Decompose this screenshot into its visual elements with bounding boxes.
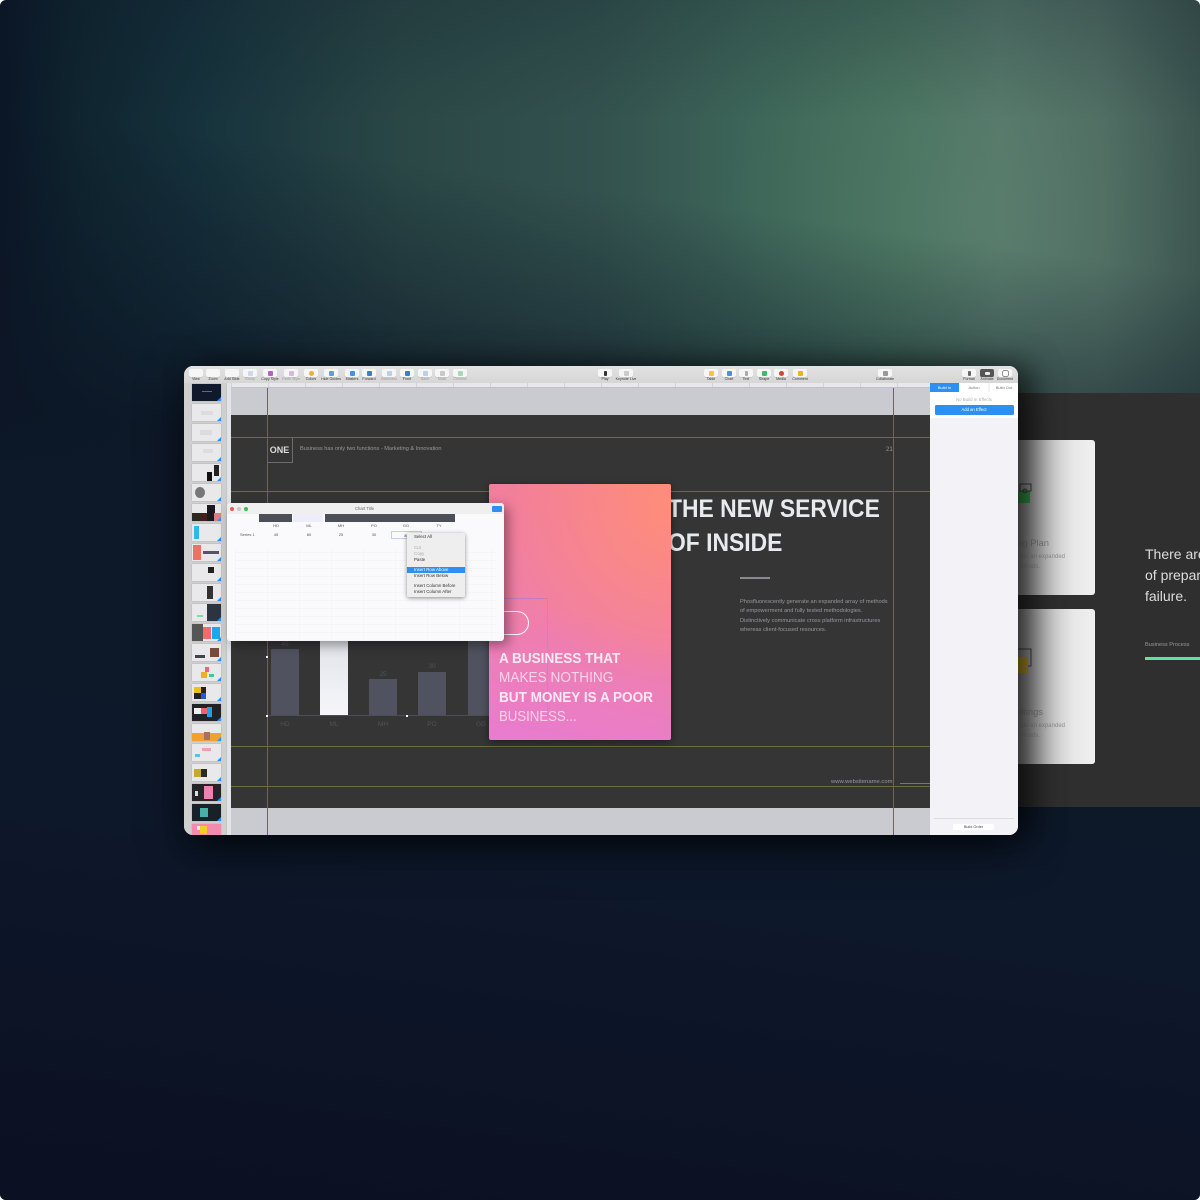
tab: build out: Build Out: [996, 385, 1012, 390]
chart data window: 80: [307, 532, 311, 537]
tool: mask: [435, 369, 449, 381]
icon: folder: [1018, 648, 1032, 673]
selected cell: [391, 531, 422, 539]
menu highlight: [407, 567, 465, 573]
title line 2: OF INSIDE: [668, 529, 782, 557]
tool: view: [189, 369, 203, 381]
tool: paste style: [282, 369, 300, 381]
canvas: grey workspace: [231, 388, 931, 835]
tool: front: Front: [403, 377, 411, 381]
tool: masters: Masters: [346, 377, 358, 381]
card text: methods.: [1015, 564, 1040, 570]
thumbnail 15: [192, 664, 221, 681]
tool: back: Back: [421, 377, 429, 381]
tool: mask: Mask: [438, 377, 446, 381]
tool: connect: Connect: [453, 377, 467, 381]
card line 4: BUSINESS...: [499, 709, 577, 725]
no effects header: [930, 392, 1018, 418]
quote text: failure.: [1145, 588, 1187, 604]
tool: keynote live: Keynote Live: [616, 377, 636, 381]
body paragraph: of empowerment and fully tested methodologies.: [740, 608, 862, 614]
tool: comment: Comment: [792, 377, 808, 381]
menu: select all: Select All: [414, 534, 432, 539]
card text: methods.: [1015, 733, 1040, 739]
card text: Generate an expanded: [1004, 554, 1065, 560]
tool: media: [774, 369, 788, 381]
right inspector panel: [930, 383, 1018, 835]
horizontal ruler: [231, 383, 931, 388]
chart data window: GG: [403, 523, 409, 528]
tool: group: [243, 369, 257, 381]
progress label: Business Process: [1145, 642, 1189, 648]
tool: copy style: [261, 369, 279, 381]
thumbnail 4: [192, 444, 221, 461]
tool: collaborate: [876, 369, 894, 381]
tool: group: Group: [245, 377, 255, 381]
menu: insert column after: Insert Column After: [414, 589, 452, 594]
tool: text: Text: [743, 377, 749, 381]
build order button: Build Order: [964, 825, 983, 829]
body paragraph: whereas client-focused resources.: [740, 627, 826, 633]
value 45: 45: [281, 641, 289, 648]
chart data window: 45: [274, 532, 278, 537]
tool: copy style: Copy Style: [261, 377, 279, 381]
bar MH 25: [369, 679, 397, 716]
quote text: [1145, 546, 1200, 604]
tab: build out: [990, 383, 1018, 392]
body paragraph: Phosfluorescently generate an expanded array of methods: [740, 599, 888, 605]
tab: build in: [930, 383, 959, 392]
tool: hide guides: [321, 369, 341, 381]
icon: briefcase: [1018, 484, 1032, 503]
thumbnail 11: [192, 584, 221, 601]
selected cell: 80: [404, 533, 409, 538]
section box: ONE: ONE: [270, 445, 289, 455]
window title: Chart Title: [355, 506, 374, 511]
bar chart: [266, 641, 489, 728]
thumbnail 14: [192, 644, 221, 661]
tool: format: Format: [963, 377, 975, 381]
thumbnail 17: [192, 704, 221, 721]
tab: build in: Build In: [938, 385, 951, 390]
thumbnail 21: [192, 784, 221, 801]
thumbnail 12: [192, 604, 221, 621]
tool: hide guides: Hide Guides: [321, 377, 341, 381]
axis labels: HD: [280, 721, 290, 728]
tool: connect: [453, 369, 467, 381]
tool: table: Table: [707, 377, 715, 381]
tab: action: Action: [968, 385, 980, 390]
thumbnail 3: [192, 424, 221, 441]
bar GG 80: [468, 640, 492, 716]
selection frame: [479, 598, 548, 716]
bar chart: MH: [378, 721, 388, 728]
website footer: www.websitename.com: [831, 779, 893, 785]
tool: backward: [381, 369, 397, 381]
bar chart: ML: [329, 721, 339, 728]
chart data window: TY: [436, 523, 442, 528]
slide subtitle: Business has only two functions - Marketing & Innovation: [300, 446, 441, 452]
menu: paste: Paste: [414, 557, 425, 562]
toolbar: [184, 366, 1018, 383]
bar PO 30: [418, 672, 446, 716]
grid area: [235, 550, 497, 641]
tab: action: [960, 383, 988, 392]
bar HD 45: [271, 649, 299, 716]
tool: view: View: [192, 377, 200, 381]
thumbnail 19: [192, 744, 221, 761]
thumbnail 8: [192, 524, 221, 541]
card text: [1004, 554, 1065, 570]
thumbnail 22: [192, 804, 221, 821]
card line 3: BUT MONEY IS A POOR: [499, 690, 653, 706]
tool: document: [997, 369, 1014, 381]
chart data window: [227, 503, 504, 641]
chart data window: 30: [372, 532, 376, 537]
thumbnail 7: [192, 504, 221, 521]
thumbnail 16: [192, 684, 221, 701]
chart data window: 25: [339, 532, 343, 537]
pink quote card: [489, 484, 671, 740]
title line 1: THE NEW SERVICE: [668, 495, 880, 523]
blue button: [492, 506, 502, 512]
page number: 21: [886, 447, 893, 453]
thumbnail 5: [192, 464, 221, 481]
chart data window: MH: [338, 523, 344, 528]
value 30: 30: [428, 663, 436, 670]
thumbnail 23: [192, 824, 221, 841]
add effect button: Add an Effect: [961, 407, 987, 412]
axis: [267, 715, 492, 716]
tool: chart: [722, 369, 736, 381]
tool: zoom: Zoom: [208, 377, 218, 381]
tool: front: [400, 369, 414, 381]
no effects header: No Build In Effects: [956, 397, 992, 402]
chart data window: PO: [371, 523, 377, 528]
tool: collaborate: Collaborate: [876, 377, 894, 381]
card line 1: A BUSINESS THAT: [499, 651, 620, 667]
tool: paste style: Paste Style: [282, 377, 300, 381]
tool: colors: [304, 369, 318, 381]
bar chart: PO: [427, 721, 437, 728]
title divider: [740, 577, 770, 579]
slide sorter sidebar: [184, 383, 226, 835]
tool: shape: [757, 369, 771, 381]
tool: forward: Forward: [362, 377, 376, 381]
card: marketing plan: [1000, 440, 1095, 595]
menu: insert row below: Insert Row Below: [414, 573, 448, 578]
slide title: [668, 495, 880, 557]
bar chart: GG: [476, 721, 486, 728]
tool: media: Media: [776, 377, 786, 381]
progress bar: [1145, 657, 1200, 660]
tool: animate: Animate: [980, 377, 994, 381]
tool: add slide: Add Slide: [224, 377, 240, 381]
thumbnail 2: [192, 404, 221, 421]
tool: keynote live: [616, 369, 636, 381]
body paragraph: [740, 599, 888, 633]
tool: shape: Shape: [759, 377, 769, 381]
tool: backward: Backward: [381, 377, 397, 381]
thumbnail 13: [192, 624, 221, 641]
thumbnail 18: [192, 724, 221, 741]
tool: zoom: [206, 369, 220, 381]
column headers: HD: [273, 523, 279, 528]
menu: insert row above: Insert Row Above: [414, 567, 448, 572]
selection handles: [266, 656, 268, 658]
card text: Generate an expanded: [1004, 723, 1065, 729]
tool: back: [418, 369, 432, 381]
thumbnail 20: [192, 764, 221, 781]
tool: add slide: [224, 369, 240, 381]
menu: cut: Cut: [414, 545, 421, 550]
traffic lights: [230, 507, 248, 511]
thumbnail 9: [192, 544, 221, 561]
thumbnail 1: [192, 384, 221, 401]
vertical ruler: [226, 383, 231, 835]
tool: document: Document: [997, 377, 1013, 381]
tool: chart: Chart: [725, 377, 733, 381]
thumbnail 10: [192, 564, 221, 581]
card line 2: MAKES NOTHING: [499, 670, 613, 686]
value 25: 25: [379, 671, 387, 678]
title bar: [227, 503, 504, 514]
tool: forward: [362, 369, 376, 381]
menu: insert column before: Insert Column Before: [414, 583, 456, 588]
card: consultings: [1000, 609, 1095, 764]
header bars: [259, 514, 292, 522]
series row: Series 1: [240, 532, 255, 537]
build order button: [953, 824, 994, 830]
tool: play: Play: [602, 377, 608, 381]
section box: ONE: [267, 438, 293, 463]
chart data window: ML: [306, 523, 312, 528]
bar ML 80: [320, 640, 348, 716]
background slide behind window: [1000, 393, 1200, 807]
tool: comment: [792, 369, 808, 381]
main slide: [231, 415, 930, 808]
tool: table: [704, 369, 718, 381]
body paragraph: Distinctively communicate cross platform infrastructures: [740, 618, 880, 624]
icon: pill outline: [480, 611, 529, 635]
add effect button: [934, 405, 1014, 415]
card text: [1004, 722, 1065, 739]
menu: copy: Copy: [414, 551, 424, 556]
app window: Keynote: [184, 366, 1018, 835]
tool: colors: Colors: [306, 377, 316, 381]
tool: masters: [345, 369, 359, 381]
thumbnail 6: [192, 484, 221, 501]
context menu: [407, 533, 465, 597]
